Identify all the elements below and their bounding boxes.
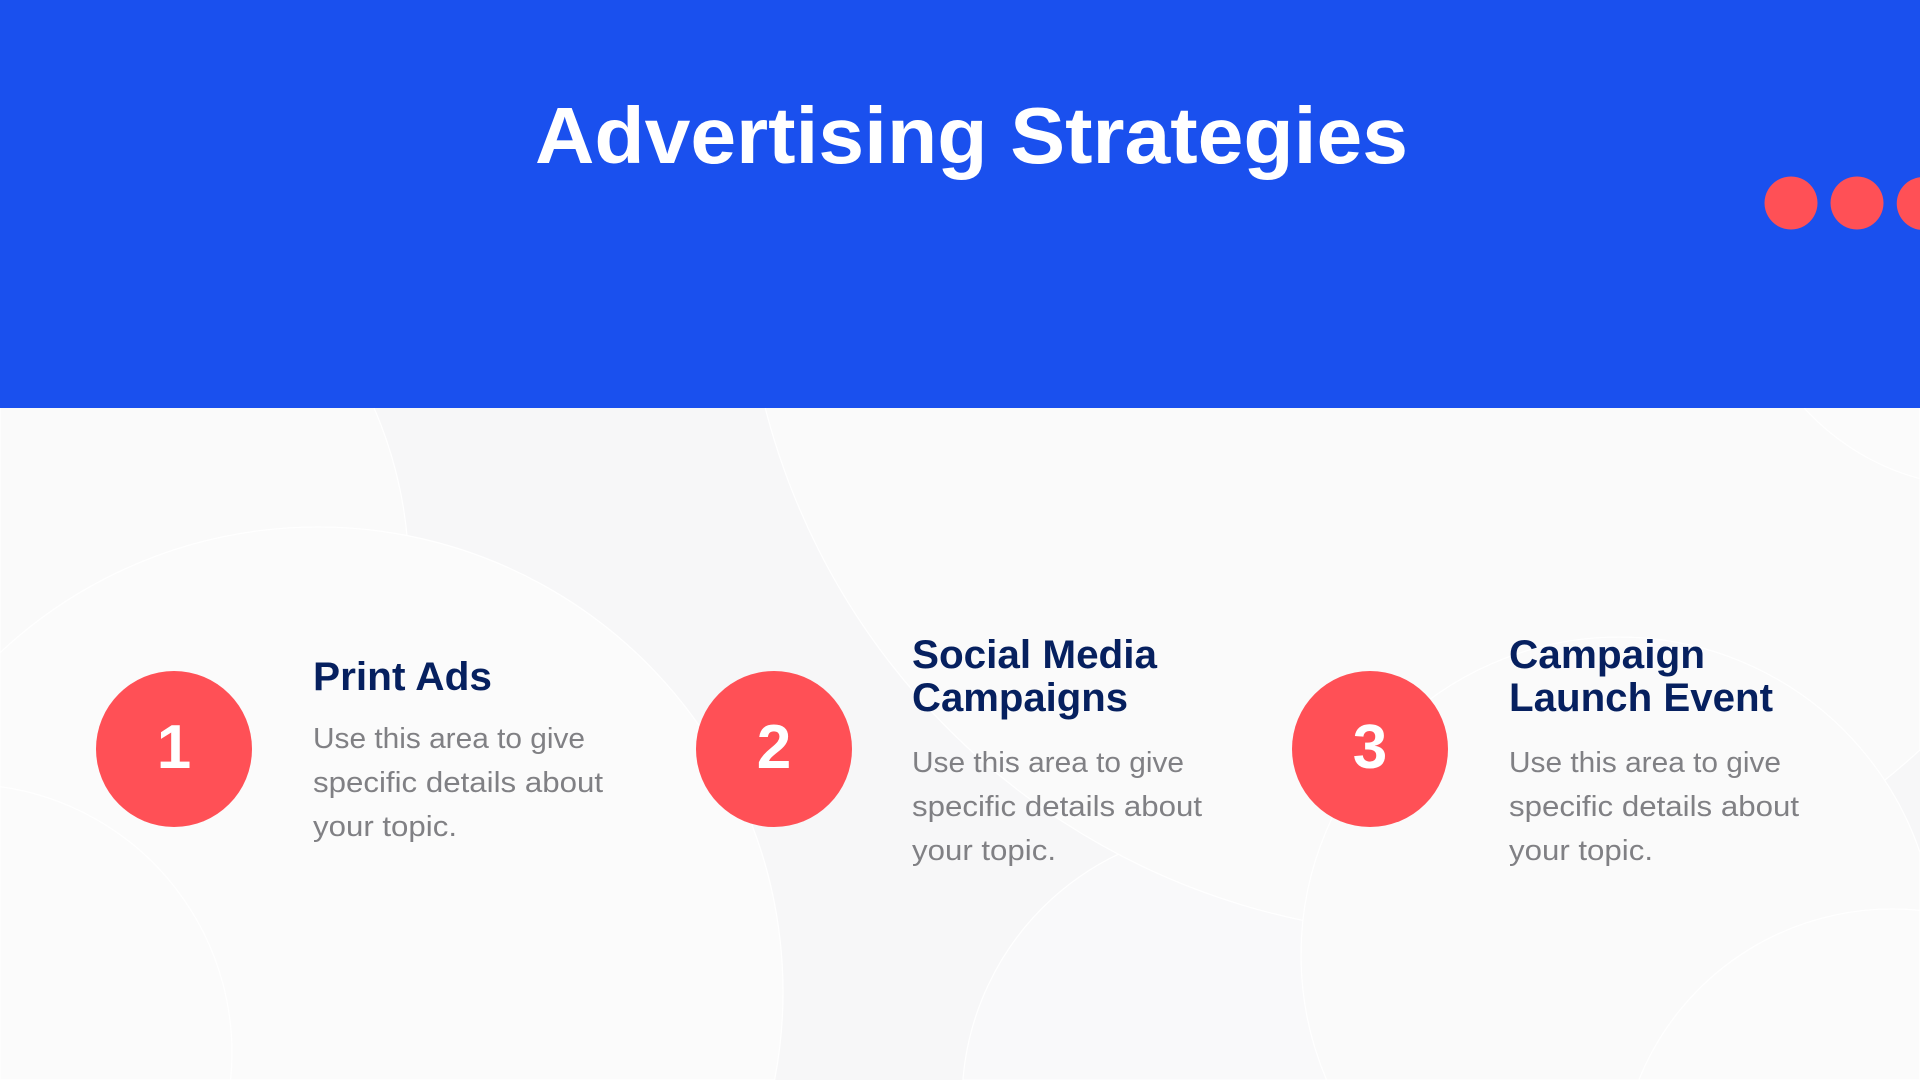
number badge 2 [696, 671, 852, 827]
description 1: specific details about [313, 767, 603, 799]
description 2: Use this area to give [912, 747, 1184, 779]
number badge 3 [1292, 671, 1448, 827]
number badge 1 [96, 671, 252, 827]
header band [0, 0, 1920, 408]
number badge 1: 1 [157, 713, 191, 782]
description 2: your topic. [912, 835, 1056, 867]
description 3: your topic. [1509, 835, 1653, 867]
background circles [0, 400, 1920, 1080]
description 1: your topic. [313, 811, 457, 843]
decorative red dots [1765, 176, 1920, 230]
heading: campaign launch event: Launch Event [1509, 676, 1773, 720]
description 1: Use this area to give [313, 723, 585, 755]
heading: campaign launch event [1509, 633, 1773, 720]
description 1 [313, 723, 603, 843]
description 3 [1509, 747, 1799, 867]
title: Advertising Strategies [535, 91, 1408, 180]
step 1: print ads [96, 655, 603, 843]
heading: social media campaigns: Campaigns [912, 676, 1128, 720]
number badge 3: 3 [1353, 713, 1387, 782]
heading: social media campaigns: Social Media [912, 633, 1158, 677]
number badge 2: 2 [757, 713, 791, 782]
step 2: social media campaigns [696, 633, 1202, 867]
description 3: Use this area to give [1509, 747, 1781, 779]
heading: campaign launch event: Campaign [1509, 633, 1705, 677]
description 2: specific details about [912, 791, 1202, 823]
description 3: specific details about [1509, 791, 1799, 823]
description 2 [912, 747, 1202, 867]
step 3: campaign launch event [1292, 633, 1799, 867]
heading: social media campaigns [912, 633, 1158, 720]
heading: print ads: Print Ads [313, 655, 492, 699]
